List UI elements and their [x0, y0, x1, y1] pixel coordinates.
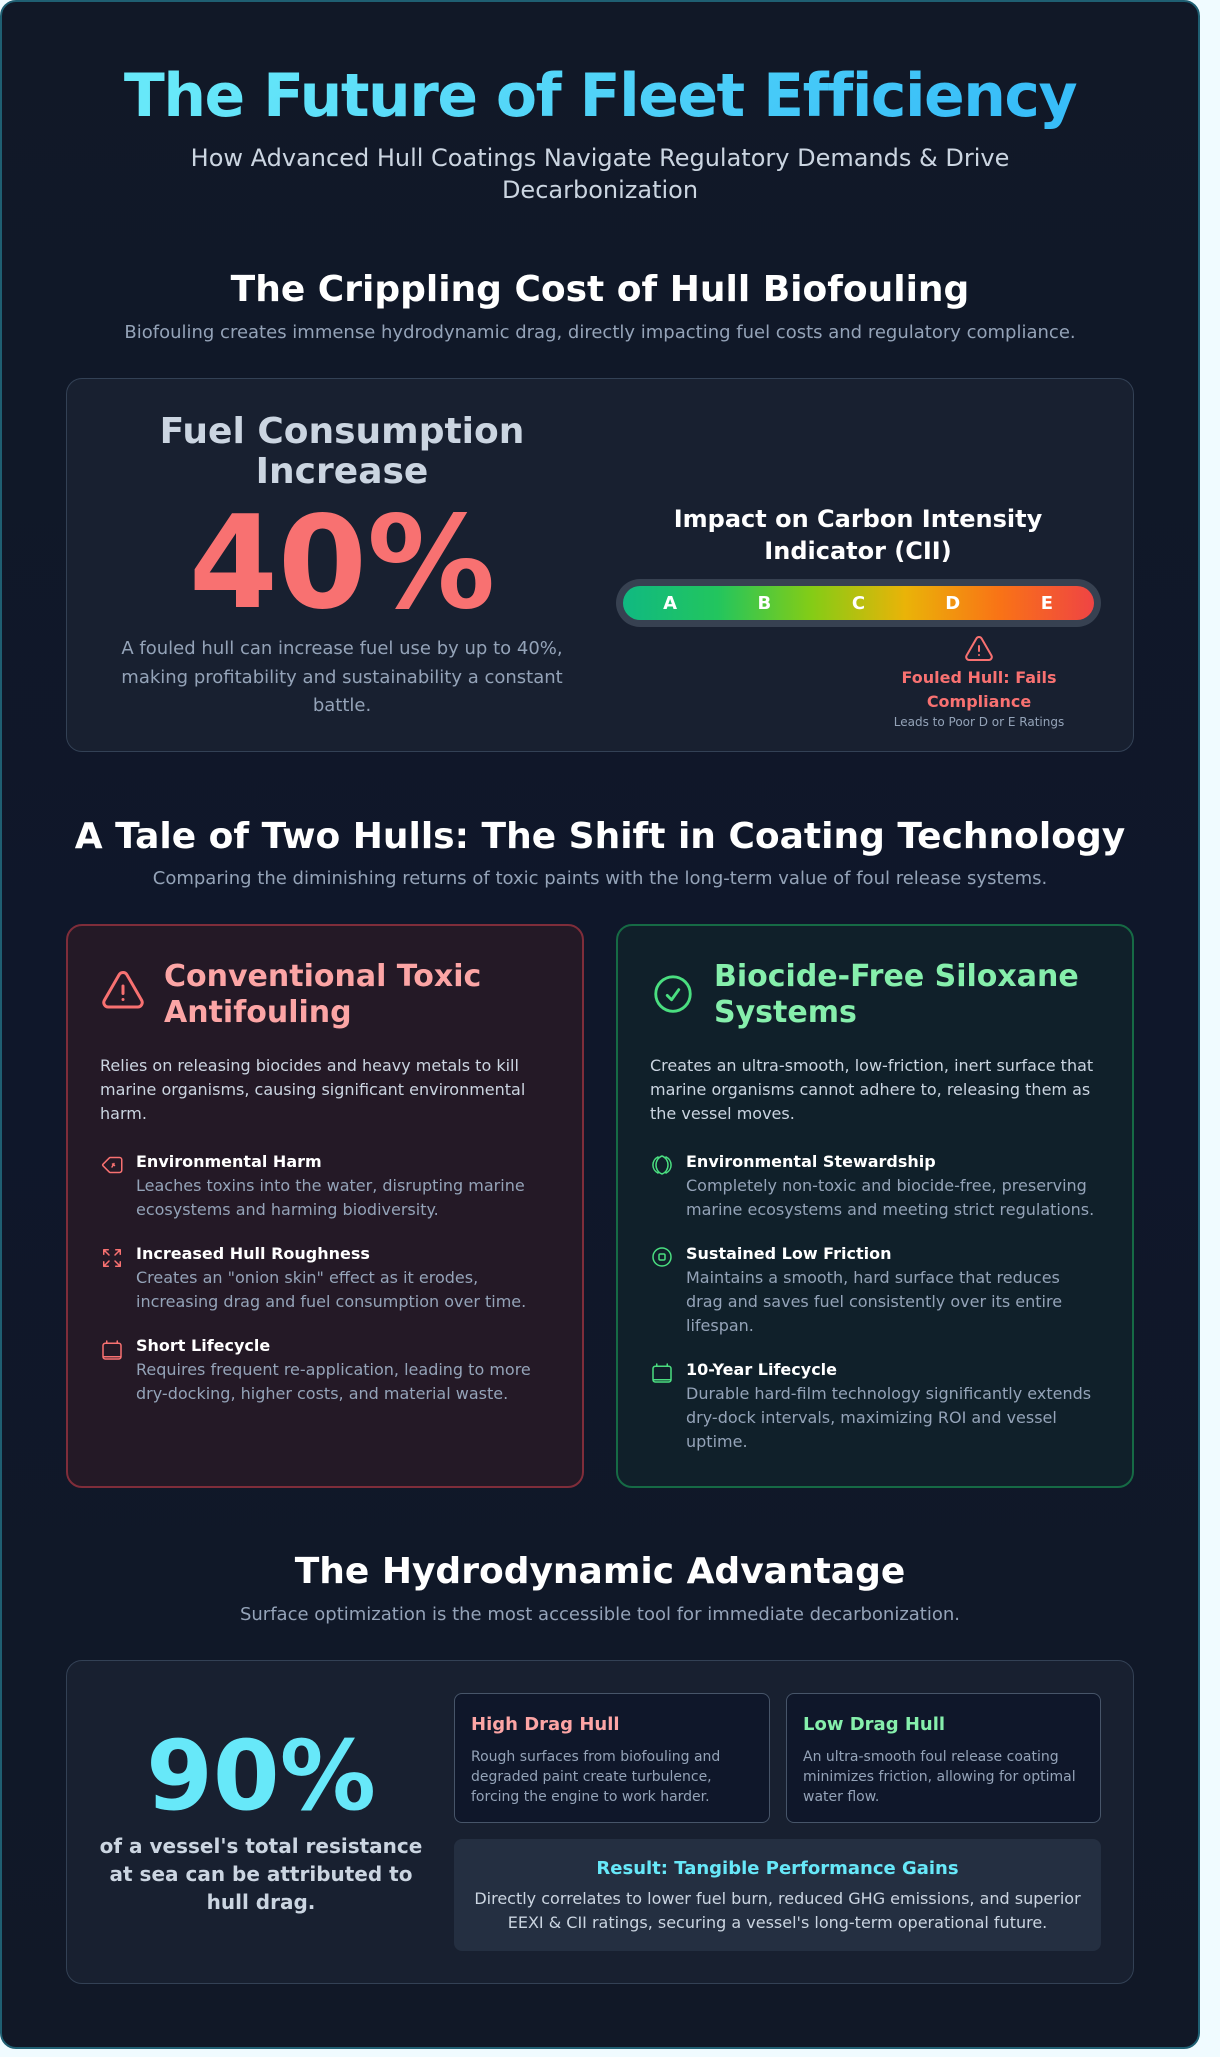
gradient A to E: D — [945, 593, 960, 614]
card heading — [164, 959, 481, 1030]
item: low friction: lifespan. — [686, 1316, 754, 1335]
card heading: Antifouling — [164, 995, 352, 1030]
poor rating note: Leads to Poor D or E Ratings — [894, 715, 1064, 729]
CII heading — [674, 505, 1042, 565]
item: low friction: Maintains a smooth, hard surface that reduces — [686, 1268, 1060, 1287]
fails compliance callout: Compliance — [927, 692, 1031, 711]
item: short lifecycle: dry-docking, higher costs, and material waste. — [136, 1384, 508, 1403]
item: environmental harm: ecosystems and harming biodiversity. — [136, 1200, 439, 1218]
card description: the vessel moves. — [650, 1104, 795, 1123]
card heading: Systems — [714, 995, 857, 1030]
card description: marine organisms, causing significant environmental — [100, 1080, 525, 1099]
stat description: hull drag. — [207, 1890, 315, 1914]
stat description — [100, 1834, 422, 1914]
icon: hull roughness — [103, 1249, 121, 1267]
card text — [471, 1749, 720, 1805]
item: 10-year lifecycle: dry-dock intervals, maximizing ROI and vessel — [686, 1408, 1057, 1427]
icon: short lifecycle — [102, 1340, 122, 1360]
result box — [454, 1839, 1101, 1951]
item: environmental stewardship: Completely non-toxic and biocide-free, preserving — [686, 1176, 1087, 1194]
high drag hull card — [454, 1693, 770, 1823]
gradient A to E: C — [852, 593, 865, 614]
CII heading: Indicator (CII) — [764, 537, 952, 565]
card heading: High Drag Hull — [471, 1714, 620, 1735]
card heading: Conventional Toxic — [164, 959, 481, 994]
card text: Rough surfaces from biofouling and — [471, 1749, 720, 1765]
result text: Directly correlates to lower fuel burn, reduced GHG emissions, and superior — [474, 1889, 1081, 1908]
big stat: 40%: 40% — [189, 489, 495, 638]
item: hull roughness — [136, 1244, 526, 1311]
icon: environmental harm — [102, 1156, 122, 1174]
result heading: Result: Tangible Performance Gains — [596, 1858, 959, 1879]
CII rating scale bar — [616, 579, 1101, 627]
gradient A to E: B — [757, 593, 771, 614]
card text: forcing the engine to work harder. — [471, 1789, 710, 1805]
item: environmental harm: Environmental Harm — [136, 1152, 322, 1170]
icon: warning triangle — [965, 636, 993, 661]
fails compliance callout: Fouled Hull: Fails — [901, 668, 1057, 687]
card text: degraded paint create turbulence, — [471, 1769, 712, 1785]
low drag hull card — [786, 1693, 1101, 1823]
header: title and subtitle — [124, 61, 1076, 204]
item: 10-year lifecycle: uptime. — [686, 1432, 748, 1451]
item: low friction: drag and saves fuel consistently over its entire — [686, 1292, 1062, 1311]
CII heading: Impact on Carbon Intensity — [674, 505, 1042, 533]
fuel consumption description: A fouled hull can increase fuel use by up to 40%, — [121, 638, 563, 659]
subtitle: How Advanced Hull Coatings Navigate Regulatory Demands & Drive — [191, 144, 1009, 172]
icon: low friction — [652, 1247, 672, 1267]
icon: check circle — [654, 975, 692, 1013]
section heading: hydrodynamic advantage: The Hydrodynamic Advantage — [295, 1551, 905, 1592]
section subheading: two hulls: Comparing the diminishing returns of toxic paints with the long-term value of foul release systems. — [153, 868, 1047, 889]
item: low friction — [686, 1244, 1062, 1335]
fuel consumption description: battle. — [313, 695, 371, 716]
item: 10-year lifecycle: Durable hard-film technology significantly extends — [686, 1384, 1091, 1403]
card description: marine organisms cannot adhere to, releasing them as — [650, 1080, 1090, 1099]
section heading: biofouling cost: The Crippling Cost of Hull Biofouling — [231, 269, 969, 310]
section heading: two hulls: A Tale of Two Hulls: The Shift in Coating Technology — [75, 816, 1125, 857]
panel: fuel consumption and CII — [66, 378, 1134, 752]
card description: harm. — [100, 1104, 147, 1123]
icon: environmental stewardship — [652, 1155, 672, 1175]
card description: Relies on releasing biocides and heavy metals to kill — [100, 1056, 519, 1075]
fuel consumption heading — [160, 411, 524, 492]
card heading: Low Drag Hull — [803, 1714, 945, 1735]
fuel consumption heading: Fuel Consumption — [160, 411, 524, 452]
item: short lifecycle — [136, 1336, 531, 1403]
gradient A to E — [623, 586, 1094, 620]
card text: An ultra-smooth foul release coating — [803, 1749, 1059, 1765]
card text: water flow. — [803, 1789, 879, 1805]
item: environmental stewardship — [686, 1152, 1094, 1218]
fuel consumption description: making profitability and sustainability a constant — [121, 667, 563, 688]
subtitle — [191, 144, 1009, 204]
item: low friction: Sustained Low Friction — [686, 1244, 891, 1263]
item: 10-year lifecycle — [686, 1360, 1091, 1451]
item: environmental harm — [136, 1152, 525, 1218]
card description — [650, 1056, 1093, 1123]
card heading: Biocide-Free Siloxane — [714, 959, 1079, 994]
stat description: at sea can be attributed to — [110, 1862, 412, 1886]
result text: EEXI & CII ratings, securing a vessel's long-term operational future. — [508, 1913, 1047, 1932]
stat description: of a vessel's total resistance — [100, 1834, 422, 1858]
item: environmental stewardship: marine ecosystems and meeting strict regulations. — [686, 1200, 1094, 1218]
subtitle: Decarbonization — [502, 176, 698, 204]
fuel consumption description — [121, 638, 563, 716]
gradient A to E: A — [663, 593, 677, 614]
item: short lifecycle: Short Lifecycle — [136, 1336, 270, 1355]
card text: minimizes friction, allowing for optimal — [803, 1769, 1076, 1785]
section subheading: biofouling cost: Biofouling creates immense hydrodynamic drag, directly impacting fuel costs and regulatory compliance. — [124, 322, 1076, 343]
item: short lifecycle: Requires frequent re-application, leading to more — [136, 1360, 531, 1379]
item: hull roughness: increasing drag and fuel consumption over time. — [136, 1292, 526, 1311]
gradient A to E: E — [1041, 593, 1053, 614]
result text — [474, 1889, 1081, 1932]
item: 10-year lifecycle: 10-Year Lifecycle — [686, 1360, 837, 1379]
icon: warning triangle — [102, 971, 144, 1008]
item: hull roughness: Creates an "onion skin" effect as it erodes, — [136, 1268, 478, 1287]
fuel consumption heading: Increase — [256, 451, 428, 492]
card heading — [714, 959, 1079, 1030]
card description: Creates an ultra-smooth, low-friction, inert surface that — [650, 1056, 1093, 1075]
card description — [100, 1056, 525, 1123]
item: environmental harm: Leaches toxins into the water, disrupting marine — [136, 1176, 525, 1194]
fails compliance callout — [901, 668, 1057, 711]
big stat: 90%: 90% — [146, 1720, 376, 1832]
panel: hydrodynamic advantage — [66, 1660, 1134, 1984]
item: environmental stewardship: Environmental Stewardship — [686, 1152, 936, 1170]
section subheading: hydrodynamic advantage: Surface optimization is the most accessible tool for immediate decarbonization. — [240, 1604, 960, 1625]
title: The Future of Fleet Efficiency — [124, 61, 1076, 131]
card text — [803, 1749, 1076, 1805]
panel: biocide-free siloxane systems — [616, 924, 1134, 1488]
panel: conventional toxic antifouling — [66, 924, 584, 1488]
icon: 10-year lifecycle — [652, 1363, 672, 1383]
item: hull roughness: Increased Hull Roughness — [136, 1244, 370, 1263]
